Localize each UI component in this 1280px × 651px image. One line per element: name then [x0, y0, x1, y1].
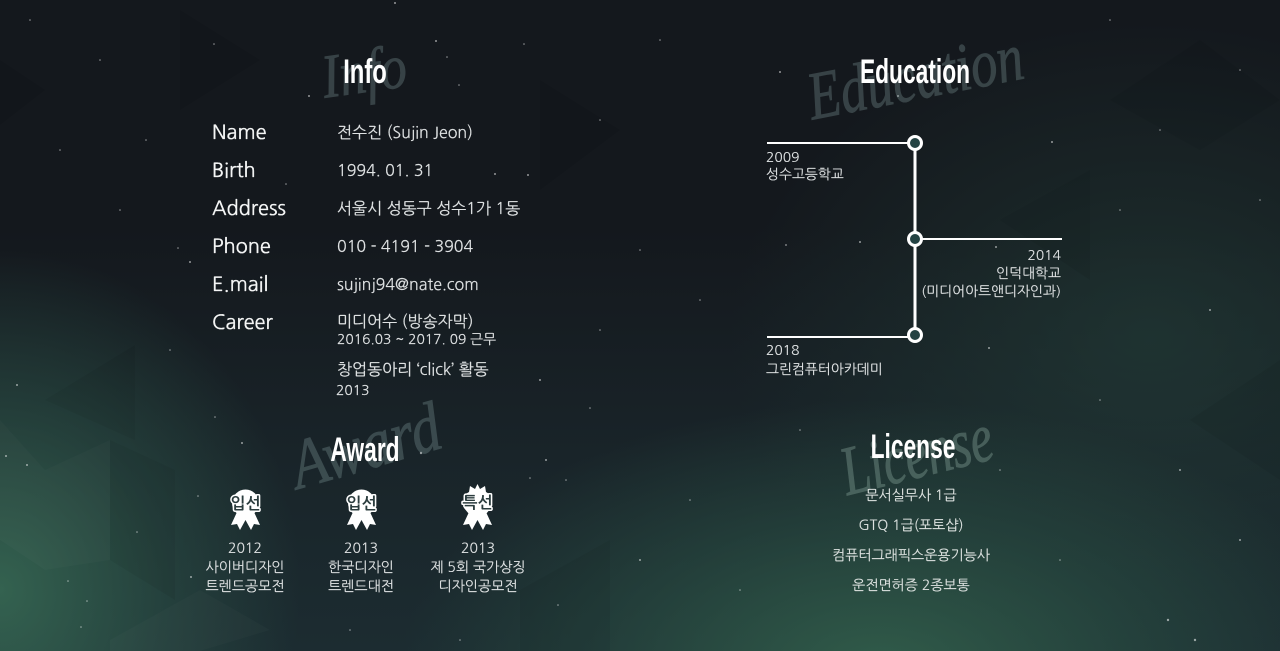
panel: personal info: E.mail — [212, 274, 268, 294]
panel: personal info: 서울시 성동구 성수1가 1동 — [337, 201, 520, 217]
text: education 2014: 인덕대학교 — [996, 266, 1061, 280]
heading: Education: Education — [860, 53, 970, 91]
icon: award ribbon 2: 입선 — [346, 495, 377, 512]
list: licenses: 문서실무사 1급 — [865, 489, 957, 503]
panel: personal info: 전수진 (Sujin Jeon) — [337, 125, 473, 141]
panel: personal info: 미디어수 (방송자막) — [337, 314, 473, 330]
icon: award ribbon 1: 입선 — [230, 495, 261, 512]
panel: personal info: 2016.03 ~ 2017. 09 근무 — [337, 332, 496, 346]
panel: personal info: Career — [212, 312, 273, 332]
text: award 2013 national symbol: 제 5회 국가상징 — [430, 561, 526, 575]
text: education 2018: 그린컴퓨터아카데미 — [766, 362, 883, 376]
heading: Education: Education — [801, 18, 1029, 134]
panel: personal info: 2013 — [336, 383, 369, 397]
panel: personal info: 창업동아리 ‘click’ 활동 — [337, 362, 489, 378]
text: award 2012: 트렌드공모전 — [206, 580, 284, 594]
heading: Award: Award — [281, 388, 450, 505]
panel: personal info: 1994. 01. 31 — [337, 163, 433, 179]
text: education 2018 — [766, 343, 883, 376]
list: licenses: 컴퓨터그래픽스운용기능사 — [832, 549, 990, 563]
panel: personal info — [212, 122, 520, 397]
icon: award ribbon 2 — [346, 490, 377, 530]
text: award 2013 Korea design: 트렌드대전 — [328, 580, 394, 594]
icon: award ribbon 1 — [230, 490, 261, 530]
panel: personal info: Phone — [212, 236, 271, 256]
heading: License: License — [871, 428, 955, 466]
heading: Info: Info — [317, 33, 411, 112]
text: education 2009 — [766, 150, 844, 181]
text: award 2013 national symbol: 2013 — [461, 542, 495, 556]
icon: award ribbon 3: 특선 — [462, 494, 493, 511]
icon: award ribbon 3 — [461, 484, 493, 530]
panel: personal info: Birth — [212, 160, 256, 180]
text: education 2009: 성수고등학교 — [766, 167, 844, 181]
heading: License: License — [833, 399, 1001, 511]
panel: personal info: 010 - 4191 - 3904 — [337, 239, 473, 255]
text: award 2013 national symbol: 디자인공모전 — [439, 580, 517, 594]
list: licenses: 운전면허증 2종보통 — [852, 579, 970, 593]
text: award 2013 Korea design: 한국디자인 — [328, 561, 394, 575]
list: licenses: GTQ 1급(포토샵) — [858, 519, 964, 533]
heading: Info: Info — [343, 53, 387, 91]
panel: personal info: Name — [212, 122, 266, 142]
text: award 2012: 2012 — [228, 542, 262, 556]
text: award 2013 national symbol — [430, 542, 526, 594]
text: award 2012 — [206, 542, 284, 594]
text: education 2014 — [921, 248, 1061, 298]
text: education 2014: (미디어아트앤디자인과) — [921, 284, 1061, 298]
text: award 2012: 사이버디자인 — [206, 561, 284, 575]
panel: personal info: Address — [212, 198, 286, 218]
list: licenses — [832, 488, 990, 593]
text: education 2014: 2014 — [1028, 248, 1061, 262]
panel: personal info: sujinj94@nate.com — [337, 277, 479, 293]
text: education 2018: 2018 — [766, 343, 799, 357]
heading: Award: Award — [330, 431, 400, 469]
text: award 2013 Korea design: 2013 — [344, 542, 378, 556]
timeline: education — [767, 135, 1062, 343]
text: education 2009: 2009 — [766, 150, 799, 164]
text: award 2013 Korea design — [328, 542, 394, 594]
